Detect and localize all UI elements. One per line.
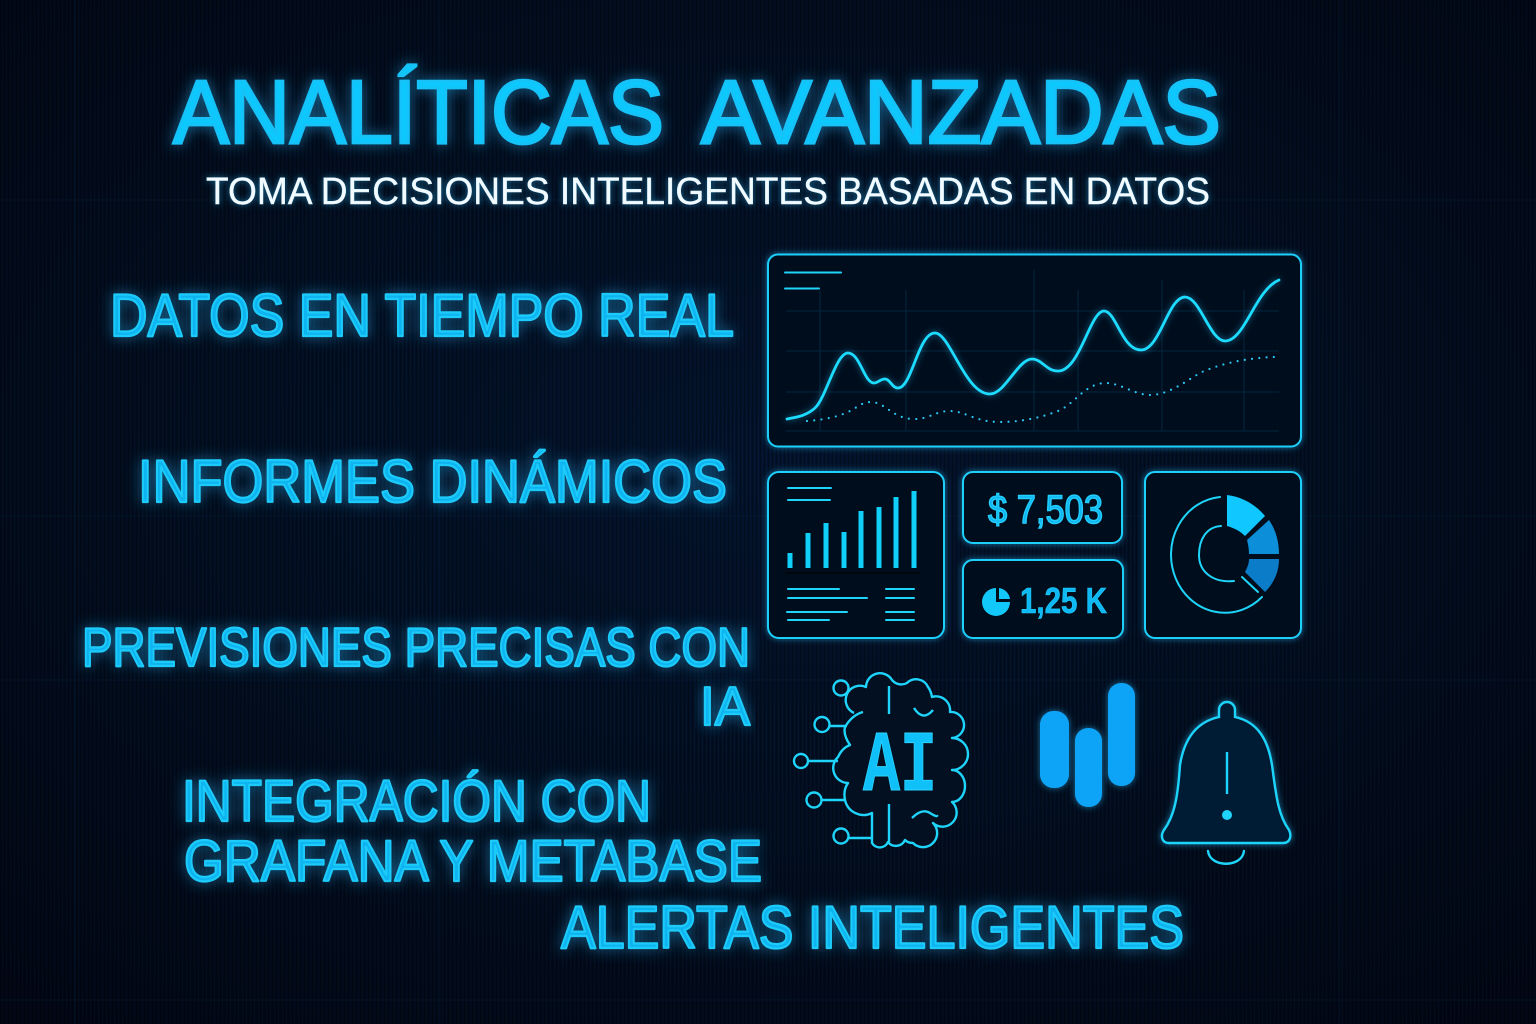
- feature label: previsiones precisas con IA: PREVISIONES PRECISAS CON: [82, 616, 750, 678]
- value: $ 7,503: [988, 488, 1103, 532]
- feature label: integración con Grafana y Metabase: GRAFANA Y METABASE: [184, 829, 762, 894]
- inner arc: [1199, 526, 1234, 581]
- feature label: previsiones precisas con IA: [82, 616, 750, 737]
- header lines: [788, 488, 831, 500]
- table lines: [787, 589, 914, 620]
- chart legend lines: [785, 272, 841, 288]
- icon: alert bell: [1162, 702, 1290, 864]
- icon: rounded bars: [1040, 683, 1135, 807]
- feature label: datos en tiempo real: DATOS EN TIEMPO REAL: [110, 282, 734, 349]
- feature label: alertas inteligentes: ALERTAS INTELIGENTES: [561, 894, 1184, 961]
- AI letters: AI: [863, 718, 937, 816]
- feature label: previsiones precisas con IA: IA: [700, 675, 750, 737]
- panel: line chart: [768, 254, 1301, 446]
- icon: pie: [982, 588, 1010, 616]
- bars: [788, 491, 916, 568]
- value: 1,25 K: [1020, 580, 1107, 621]
- outer arc: [1171, 497, 1262, 613]
- donut segment 1: [1227, 495, 1265, 536]
- panel: revenue stat: [963, 472, 1122, 543]
- panel: count stat: [963, 560, 1123, 638]
- subtitle: TOMA DECISIONES INTELIGENTES BASADAS EN DATOS: [206, 171, 1210, 213]
- donut segment 3: [1245, 559, 1279, 592]
- solid line series: [787, 280, 1279, 419]
- panel: bar chart: [768, 472, 944, 638]
- feature label: integración con Grafana y Metabase: INTEGRACIÓN CON: [182, 769, 651, 834]
- panel: donut chart: [1145, 472, 1301, 638]
- feature label: integración con Grafana y Metabase: [182, 769, 762, 894]
- title: [173, 63, 1221, 163]
- title: AVANZADAS: [701, 63, 1221, 163]
- title: ANALÍTICAS: [173, 63, 664, 163]
- feature label: informes dinámicos: INFORMES DINÁMICOS: [138, 448, 727, 515]
- clapper: [1208, 851, 1244, 864]
- icon connectors: [794, 680, 937, 844]
- donut segment 2: [1247, 520, 1279, 554]
- dotted line series: [807, 357, 1274, 422]
- exclamation: [1226, 752, 1228, 794]
- icon: AI brain: [794, 673, 968, 847]
